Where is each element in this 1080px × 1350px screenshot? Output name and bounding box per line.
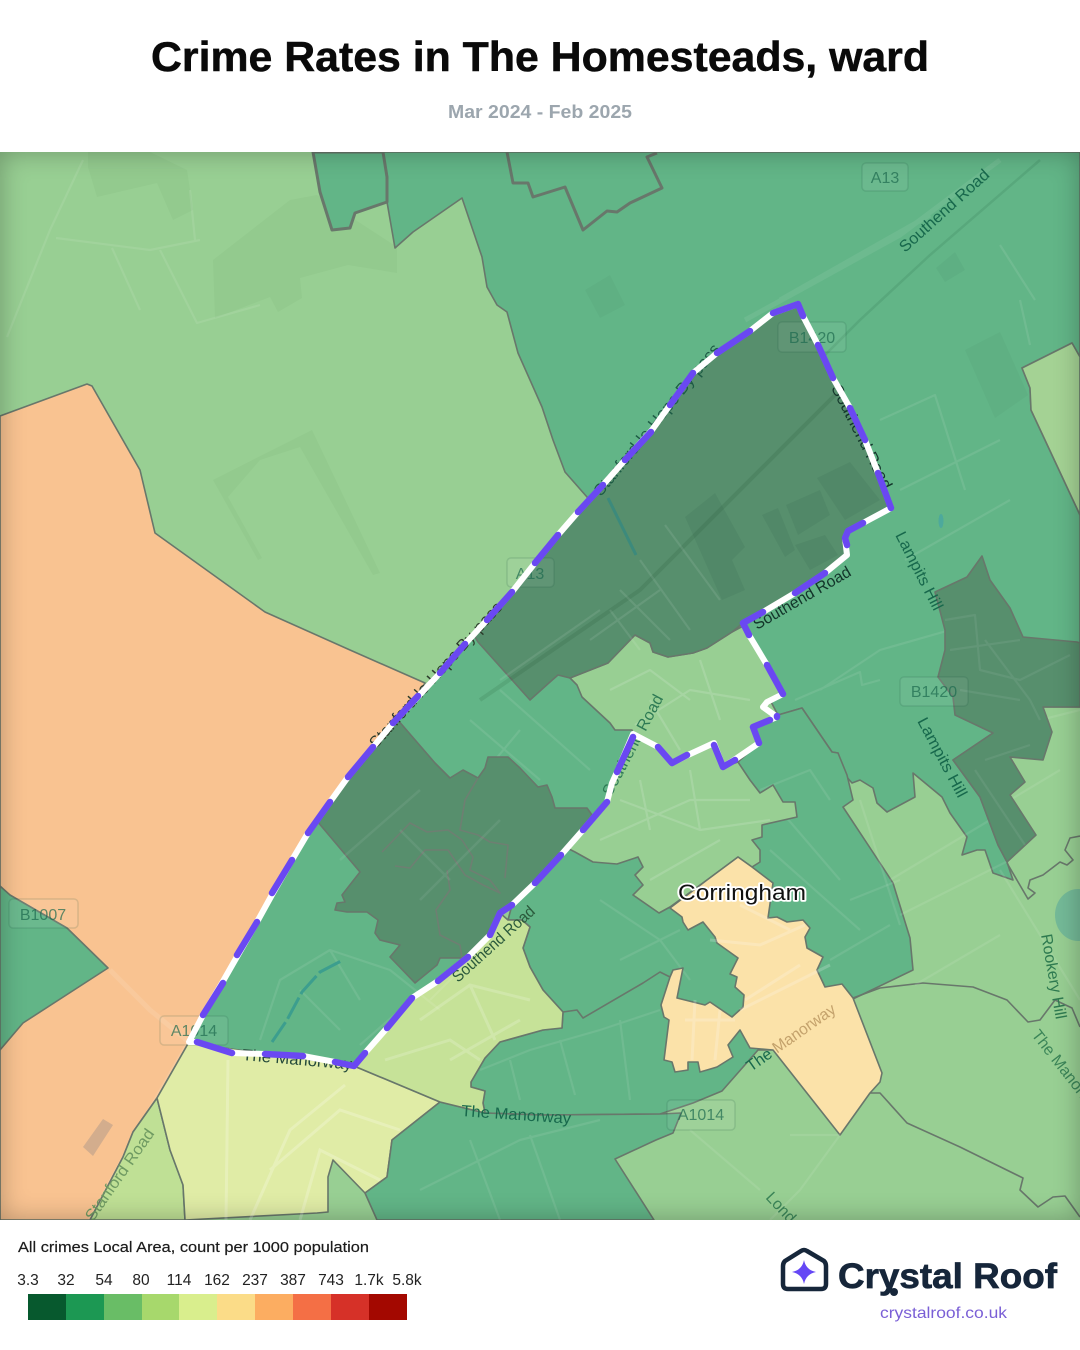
subtitle: date range: Mar 2024 - Feb 2025 [448, 102, 632, 122]
road badge: A1014 east: A1014 [678, 1107, 724, 1124]
road label: Lampits Hill north: Lampits Hill [891, 529, 946, 613]
legend [17, 1239, 422, 1320]
road badge: B1420 ward: B1420 [789, 330, 835, 347]
orange area roads and quarry patch [83, 970, 189, 1220]
area: pale yellow green south [157, 1042, 440, 1220]
north east fields and roads [744, 158, 1040, 701]
road badge: B1420 east [900, 677, 968, 706]
legend tick values: 5.8k [392, 1272, 422, 1289]
east roads [690, 710, 1080, 1220]
area: light green lake shadow [1055, 889, 1080, 941]
ward boundary: white and purple dashed outline [189, 304, 891, 1066]
legend title: All crimes Local Area, count per 1000 population [18, 1239, 369, 1256]
legend colour scale [28, 1294, 407, 1320]
road label: The Manorway Corringham: The Manorway [744, 1001, 839, 1075]
light green roads [600, 770, 770, 880]
dark east roads [945, 615, 1070, 845]
area: light green notch east [1022, 343, 1080, 515]
road badge: A1014 east [667, 1100, 735, 1130]
legend tick values: 32 [57, 1272, 75, 1289]
teal pond [938, 514, 944, 528]
area: green top-left cell [313, 152, 387, 230]
area: green north east [383, 152, 1080, 880]
area: dark green south part of ward [317, 719, 592, 983]
area: pale green south-west [90, 1098, 185, 1220]
road label: Southend Road ward south: Southend Road [750, 564, 854, 633]
area: south green cells [471, 708, 913, 1115]
top ward outline [507, 152, 662, 230]
road badge: B1007 [9, 899, 78, 928]
road label: Stanford Road: Stanford Road [82, 1126, 158, 1224]
road label: Southend Road pocket: Southend Road [600, 692, 667, 799]
area: light green south of boundary [570, 762, 798, 914]
map base: light green area [0, 152, 1080, 1220]
legend tick values: 162 [204, 1272, 230, 1289]
teal stream in south ward [272, 960, 343, 1042]
pocket roads [610, 660, 750, 750]
road badge: A13 north: A13 [871, 170, 899, 187]
logo: Crystal Roof [783, 1250, 1057, 1322]
road label: Southend Road south: Southend Road [449, 903, 539, 986]
dark ward blocks and roads [479, 394, 836, 702]
legend tick values: 54 [95, 1272, 113, 1289]
south roads [420, 770, 900, 1220]
lower right boundary lines [853, 836, 1080, 1217]
legend tick values: 80 [132, 1272, 150, 1289]
inner outlines of dark south area [340, 778, 508, 958]
faint fields in the north-west [88, 152, 397, 575]
legend tick values: 3.3 [17, 1272, 39, 1289]
area: dark green east [935, 556, 1080, 862]
road badge: B1007: B1007 [20, 907, 66, 924]
area: orange west [0, 384, 425, 1220]
road label: Rookery Hill: Rookery Hill [1037, 933, 1069, 1020]
area: green south-central [365, 1102, 681, 1220]
icon: house with star [783, 1250, 826, 1289]
road badge: A1014 west [160, 1016, 228, 1045]
road badge: A13 ward: A13 [516, 566, 544, 583]
area: pocket light green within ward [570, 625, 783, 767]
road label: By-pass south: Stanford-le-Hope By-pass [366, 599, 506, 752]
legend tick values: 1.7k [354, 1272, 384, 1289]
legend tick values: 237 [242, 1272, 268, 1289]
road badge: B1420 ward [778, 322, 846, 352]
website link: crystalroof.co.uk [880, 1305, 1008, 1322]
road badge: A1014 west: A1014 [171, 1023, 217, 1040]
road label: Lampits Hill south: Lampits Hill [913, 715, 970, 801]
place label: Corringham: Corringham [678, 880, 806, 905]
road badge: A13 ward [507, 558, 554, 587]
south cell divider [563, 972, 670, 1018]
yellow green roads [385, 985, 530, 1060]
area: yellow green south-central [354, 913, 563, 1113]
road badge: B1420 east: B1420 [911, 684, 957, 701]
ward roads [260, 690, 590, 1045]
north-west tracks [7, 160, 260, 337]
road label: Southend Road ward east: Southend Road [827, 382, 895, 492]
wordmark keyhole detail [890, 1288, 898, 1296]
area: green west wedge [0, 886, 108, 1050]
road label: The Manorway ward base: The Manorway [242, 1047, 353, 1074]
road label: The Manorway south: The Manorway [461, 1103, 572, 1128]
area: dark green north part of ward [473, 304, 891, 700]
road label: London Road: London Road [762, 1189, 840, 1271]
legend tick values: 114 [167, 1272, 192, 1289]
teal stream in north ward [608, 498, 636, 555]
title: Crime Rates in The Homesteads, ward [151, 33, 929, 80]
legend tick values: 387 [280, 1272, 306, 1289]
road badge: A13 north [862, 163, 908, 191]
road label: Southend Road north east: Southend Road [896, 166, 993, 256]
legend tick values [17, 1272, 422, 1289]
legend tick values: 743 [318, 1272, 344, 1289]
ward base fill [194, 638, 632, 1062]
Corringham roads [685, 905, 830, 1060]
wordmark: Crystal Roof [838, 1257, 1057, 1296]
area: pale yellow Corringham [661, 857, 882, 1135]
south roads [226, 1060, 400, 1220]
road label: By-pass north: Stanford-le-Hope By-pass [591, 341, 724, 500]
